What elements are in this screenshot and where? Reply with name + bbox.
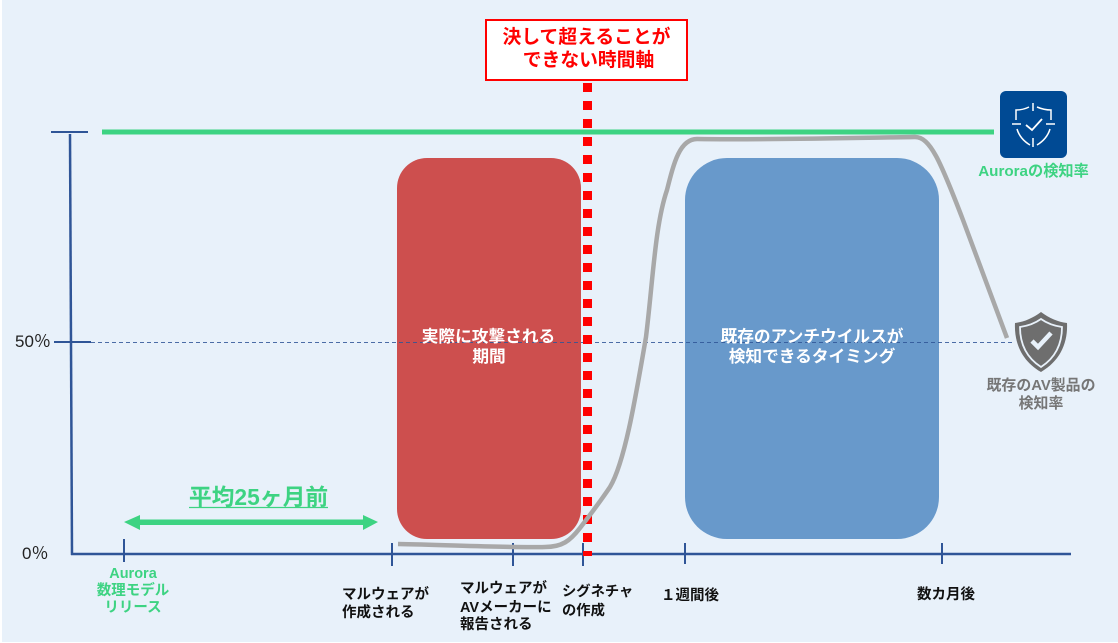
green Aurora detection line	[102, 130, 994, 134]
label: 0%: 0％	[22, 544, 48, 563]
callout: time axis limit: できない時間軸	[523, 49, 654, 70]
x label: malware created: マルウェアが	[342, 585, 429, 603]
x label: Aurora model release: 数理モデル	[97, 581, 170, 599]
text: antivirus detection timing: 検知できるタイミング	[729, 346, 896, 366]
text: attack period: 期間	[472, 347, 506, 366]
y axis	[51, 132, 91, 555]
text: antivirus detection timing	[721, 326, 904, 366]
label: Aurora detection rate: Auroraの検知率	[978, 162, 1089, 180]
icon: Aurora shield	[1000, 91, 1067, 158]
callout: time axis limit	[486, 20, 687, 80]
x label: signature created: シグネチャ	[562, 582, 633, 600]
label: existing AV detection rate	[987, 376, 1095, 412]
label: existing AV detection rate: 検知率	[1019, 394, 1063, 412]
panel background: attack period	[397, 158, 581, 539]
label: existing AV detection rate: 既存のAV製品の	[987, 376, 1095, 394]
x label: signature created: の作成	[562, 601, 605, 619]
x label: malware created: 作成される	[342, 603, 414, 621]
x label: signature created	[562, 582, 633, 619]
x label: malware reported	[460, 579, 552, 633]
x axis	[71, 539, 1071, 566]
icon: existing AV shield	[1015, 312, 1067, 372]
text: attack period	[422, 327, 555, 366]
callout: time axis limit: 決して超えることが	[503, 25, 671, 47]
x label: Aurora model release: Aurora	[109, 566, 158, 582]
red dotted timeline limit	[583, 83, 592, 556]
x label: Aurora model release	[97, 566, 170, 616]
text: attack period: 実際に攻撃される	[422, 327, 555, 346]
text: antivirus detection timing: 既存のアンチウイルスが	[721, 326, 904, 346]
x label: one week later: １週間後	[661, 586, 719, 604]
x label: Aurora model release: リリース	[104, 600, 162, 616]
50% dashed reference line	[91, 342, 1015, 344]
double-headed arrow	[124, 515, 378, 530]
label: 50%: 50％	[15, 332, 51, 351]
x label: several months later: 数カ月後	[917, 585, 975, 603]
gray existing AV detection curve	[398, 137, 1007, 547]
x label: malware reported: 報告される	[460, 615, 532, 633]
panel background: antivirus detection timing	[685, 158, 939, 539]
x label: malware created	[342, 585, 429, 621]
x label: malware reported: AVメーカーに	[460, 599, 552, 616]
label: average 25 months earlier: 平均25ヶ月前	[189, 484, 328, 510]
x label: malware reported: マルウェアが	[460, 579, 547, 597]
